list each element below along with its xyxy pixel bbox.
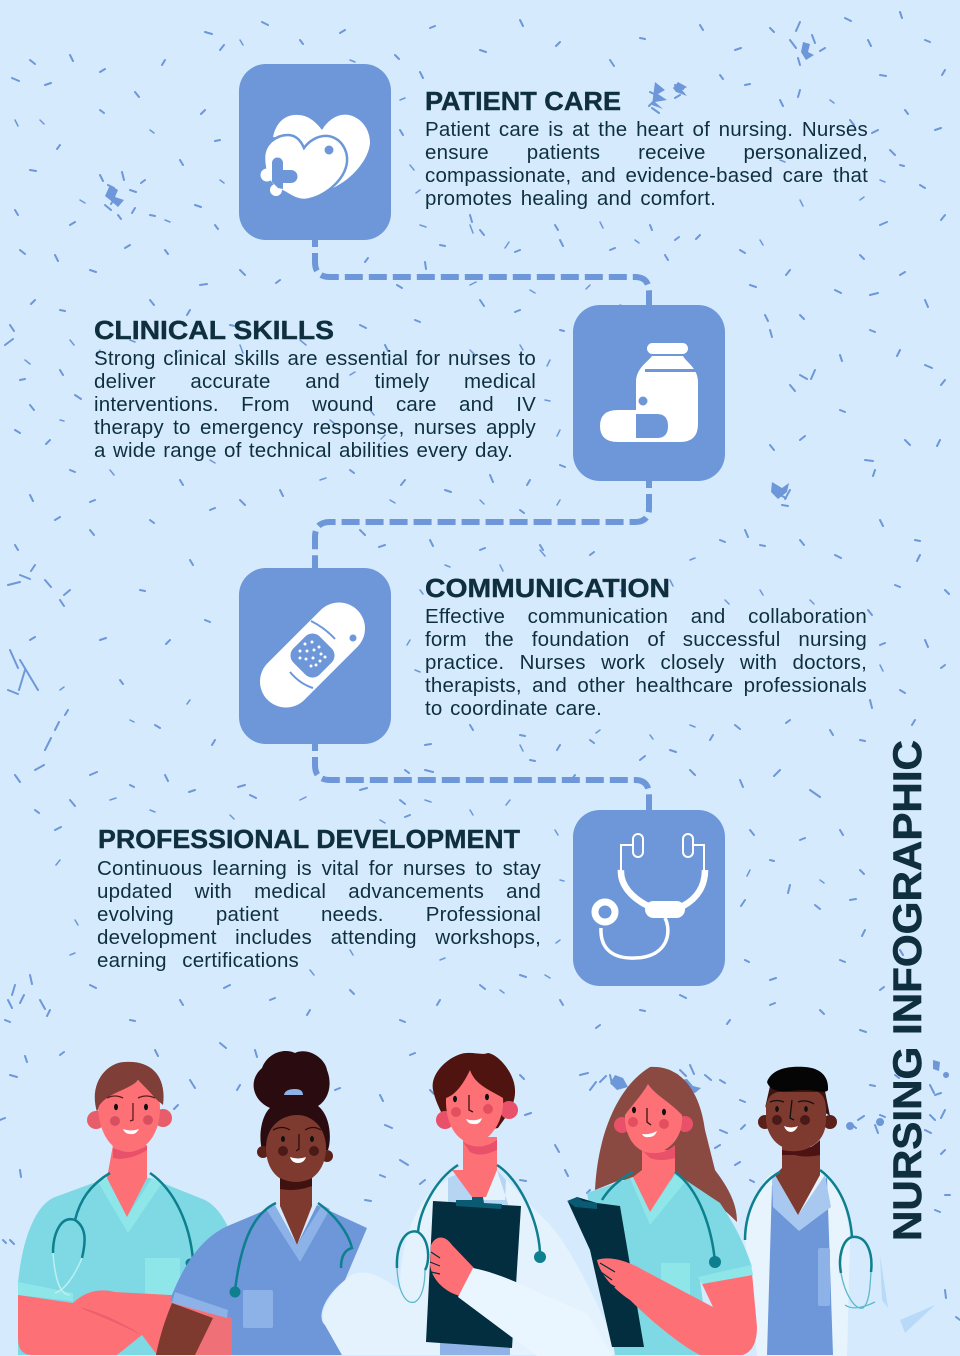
text: clinical skills description: interventions. From wound care and IV: [94, 393, 536, 416]
connector: patient care to clinical skills: [315, 240, 649, 305]
text: clinical skills description: Strong clinical skills are essential for nurses to: [94, 347, 536, 370]
panel: patient care: [425, 88, 868, 210]
text: clinical skills description: therapy to emergency response, nurses apply: [94, 416, 536, 439]
text: professional development description: updated with medical advancements and: [97, 880, 541, 903]
illustration: nurse with crossed arms: [18, 1062, 232, 1355]
text: patient care description: [425, 118, 868, 210]
connector: clinical skills to communication: [315, 481, 649, 568]
text: clinical skills description: a wide range of technical abilities every day.: [94, 439, 513, 462]
text: professional development description: evolving patient needs. Professional: [97, 903, 541, 926]
text: patient care description: promotes healing and comfort.: [425, 187, 716, 210]
icon: medicine bottle and pill: [573, 305, 725, 481]
text: clinical skills description: [94, 347, 536, 462]
title: nursing infographic: NURSING INFOGRAPHIC: [886, 740, 930, 1241]
panel: professional development: [97, 826, 541, 972]
connector: communication to professional development: [315, 744, 649, 810]
illustration: doctor with clipboard: [323, 1053, 620, 1356]
text: professional development description: Continuous learning is vital for nurses to stay: [97, 857, 541, 880]
illustration: nurse with hair bun: [156, 1051, 367, 1355]
text: communication description: practice. Nurses work closely with doctors,: [425, 651, 867, 674]
illustration: doctor in white coat: [745, 1067, 935, 1356]
icon: stethoscope: [573, 810, 725, 986]
text: patient care description: compassionate, and evidence-based care that: [425, 164, 868, 187]
text: clinical skills description: deliver accurate and timely medical: [94, 370, 536, 393]
icon: heart care: [239, 64, 391, 240]
text: patient care description: Patient care is at the heart of nursing. Nurses: [425, 118, 868, 141]
illustration: nurse with long hair and clipboard: [567, 1067, 757, 1355]
panel: communication: [425, 575, 867, 720]
icon: bandage: [239, 568, 391, 744]
text: communication description: Effective communication and collaboration: [425, 605, 867, 628]
text: professional development description: earning certifications: [97, 949, 299, 972]
text: communication description: [425, 605, 867, 720]
text: patient care description: ensure patients receive personalized,: [425, 141, 868, 164]
text: communication description: form the foundation of successful nursing: [425, 628, 867, 651]
text: professional development description: [97, 857, 541, 972]
text: communication description: to coordinate care.: [425, 697, 602, 720]
text: communication description: therapists, and other healthcare professionals: [425, 674, 867, 697]
text: professional development description: development includes attending workshops,: [97, 926, 541, 949]
panel: clinical skills: [94, 317, 536, 462]
